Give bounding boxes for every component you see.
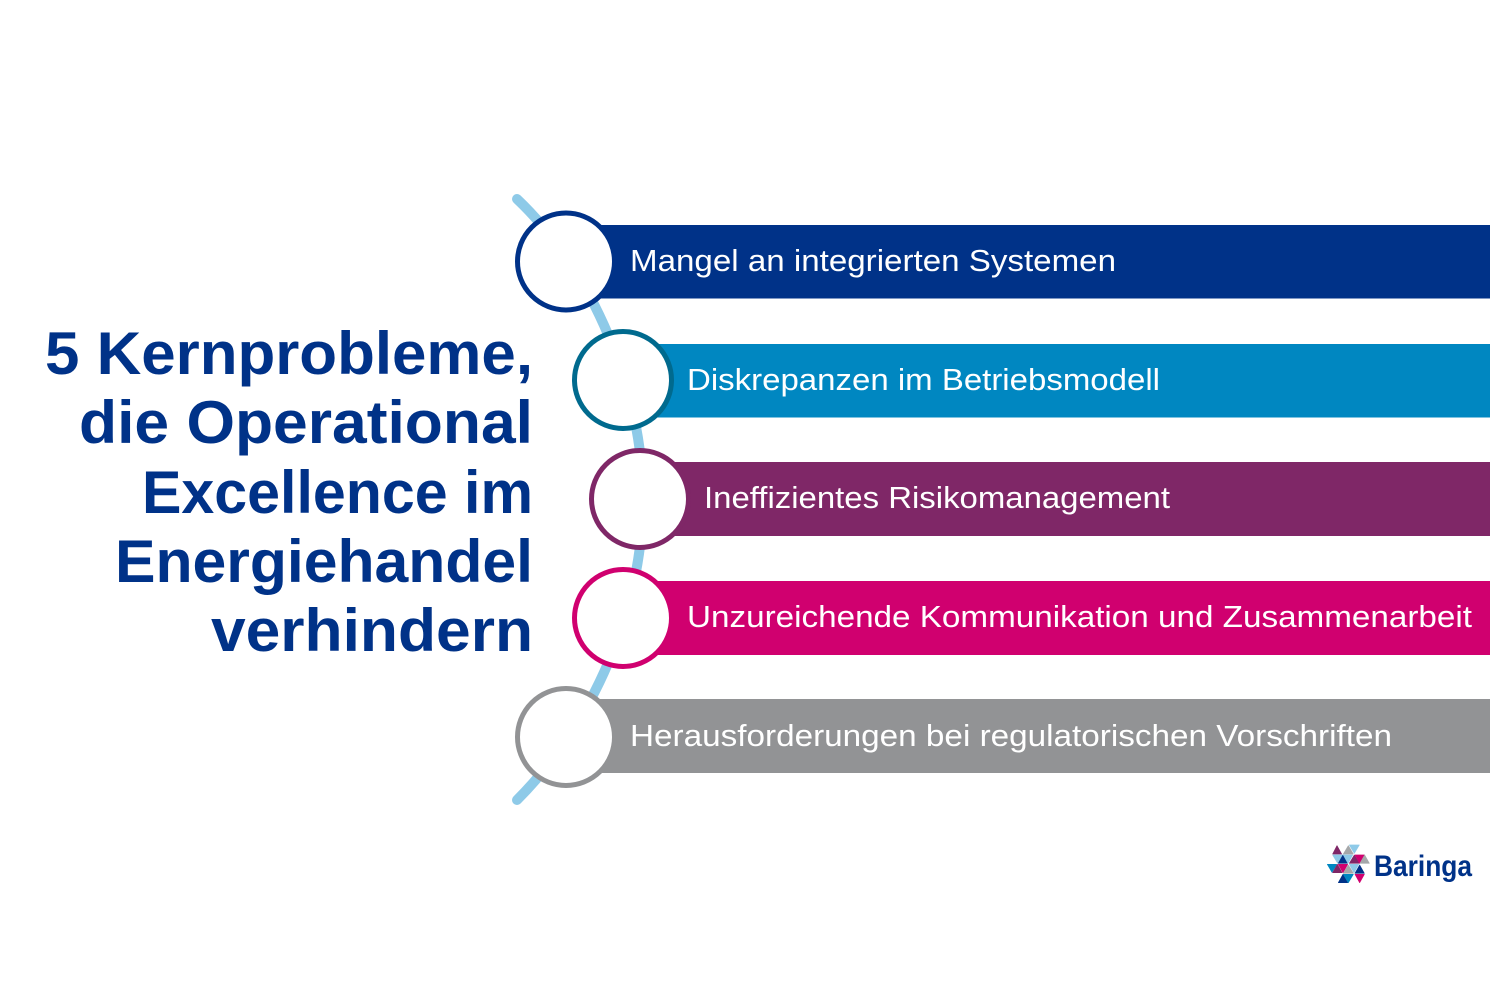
title: Excellence im [142, 459, 533, 526]
bar 4: Unzureichende Kommunikation und Zusammenarbeit [623, 581, 1490, 655]
bar 3: Ineffizientes Risikomanagement: Ineffizientes Risikomanagement [704, 480, 1170, 515]
circle 2 [574, 332, 672, 428]
title: 5 Kernprobleme, [45, 320, 533, 387]
title [45, 320, 533, 664]
circle 5 [518, 688, 614, 786]
icon: logo triangles [1327, 845, 1369, 883]
title: verhindern [211, 597, 533, 664]
circle 1 [518, 213, 614, 310]
title: die Operational [79, 389, 533, 456]
logo wordmark: Baringa [1374, 850, 1472, 883]
title: Energiehandel [115, 528, 533, 595]
bar 5: Herausforderungen bei regulatorischen Vorschriften: Herausforderungen bei regulatorischen Vorschriften [630, 718, 1392, 753]
bar 2: Diskrepanzen im Betriebsmodell [623, 344, 1490, 418]
circle 4 [574, 570, 672, 666]
curved connector line [517, 199, 643, 800]
bar 2: Diskrepanzen im Betriebsmodell: Diskrepanzen im Betriebsmodell [687, 362, 1160, 397]
bar 4: Unzureichende Kommunikation und Zusammenarbeit: Unzureichende Kommunikation und Zusammenarbeit [687, 599, 1472, 634]
bar 1: Mangel an integrierten Systemen [566, 225, 1490, 298]
bar 1: Mangel an integrierten Systemen: Mangel an integrierten Systemen [630, 243, 1116, 278]
circle 3 [592, 450, 688, 548]
logo: Baringa [1327, 845, 1472, 883]
bar 5: Herausforderungen bei regulatorischen Vorschriften [566, 699, 1490, 773]
bar 3: Ineffizientes Risikomanagement [640, 462, 1490, 536]
